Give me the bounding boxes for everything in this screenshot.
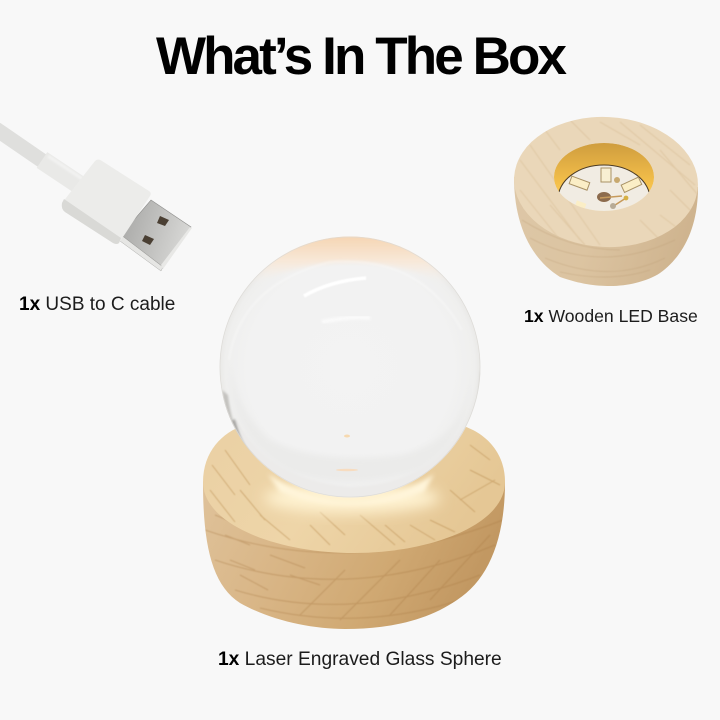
label: Laser Engraved Glass Sphere: 1x Laser Engraved Glass Sphere	[218, 649, 502, 670]
icon: glass sphere	[220, 230, 482, 498]
glow	[264, 483, 440, 513]
icon: USB cable	[0, 129, 192, 271]
LED cavity	[554, 143, 654, 211]
product illustrations	[0, 116, 698, 629]
icon: wooden LED base	[511, 112, 701, 286]
label: USB to C cable: 1x USB to C cable	[19, 294, 175, 315]
label: Wooden LED Base: 1x Wooden LED Base	[524, 306, 698, 326]
icon: large wooden base	[203, 425, 505, 629]
title: What’s In The Box	[156, 27, 564, 86]
